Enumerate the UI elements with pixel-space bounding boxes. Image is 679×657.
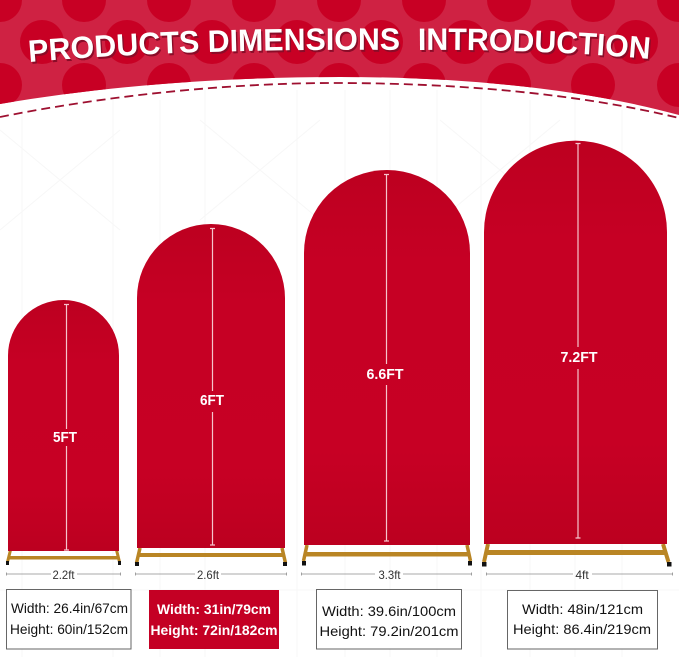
arch 6ft [135, 224, 287, 566]
title text: PRODUCTS [29, 30, 198, 62]
title [29, 28, 651, 64]
stand [135, 548, 287, 566]
width dimension 2.2ft: 2.2ft [52, 568, 75, 582]
width dimension 4ft [486, 568, 672, 582]
width dimension 2.6ft: 2.6ft [197, 568, 220, 582]
size box 6ft highlighted: Height: 72in/182cm [150, 622, 278, 638]
backdrop panel [304, 170, 470, 545]
height line [64, 304, 69, 550]
arch 6.6ft [302, 170, 472, 566]
backdrop panel [484, 141, 667, 544]
stand [482, 544, 672, 566]
size box 5ft [6, 590, 131, 649]
stand [6, 550, 121, 565]
size box 6.6ft: Width: 39.6in/100cm [322, 603, 456, 619]
height line [576, 144, 580, 538]
height label: 7.2FT [560, 350, 598, 366]
size box 7.2ft: Width: 48in/121cm [522, 601, 643, 617]
dashed stitch line [0, 83, 679, 118]
height line [210, 228, 215, 545]
size box 7.2ft [508, 590, 658, 649]
title shadow: PRODUCTS [32, 34, 200, 64]
width dimension 3.3ft [302, 568, 472, 582]
height line [384, 174, 389, 541]
backdrop panel [8, 300, 119, 551]
backdrop panel [137, 224, 285, 548]
size box 5ft: Width: 26.4in/67cm [11, 600, 128, 616]
title shadow: INTRODUCTION [422, 30, 651, 61]
size box 7.2ft: Height: 86.4in/219cm [513, 621, 651, 637]
width dimension 3.3ft: 3.3ft [378, 568, 401, 582]
polka dots [0, 0, 679, 107]
size box 6ft highlighted [149, 590, 279, 649]
title text: DIMENSIONS [209, 28, 399, 52]
arch 7.2ft [482, 141, 672, 566]
width dimension 2.6ft [136, 568, 286, 582]
height label: 5FT [53, 430, 77, 446]
title text [29, 28, 650, 62]
size box 6.6ft [316, 590, 462, 649]
arch 5ft [6, 300, 121, 565]
size box 6.6ft: Height: 79.2in/201cm [320, 623, 458, 639]
title text: INTRODUCTION [420, 28, 650, 59]
height label: 6.6FT [366, 367, 404, 383]
header banner [0, 0, 679, 115]
title shadow [32, 30, 651, 64]
size box 5ft: Height: 60in/152cm [10, 621, 128, 637]
width dimension 2.2ft [6, 568, 120, 582]
width dimension 4ft: 4ft [575, 568, 589, 582]
title shadow: DIMENSIONS [212, 30, 400, 54]
size box 6ft highlighted: Width: 31in/79cm [157, 601, 271, 617]
stand [302, 545, 472, 566]
height label: 6FT [200, 393, 224, 409]
